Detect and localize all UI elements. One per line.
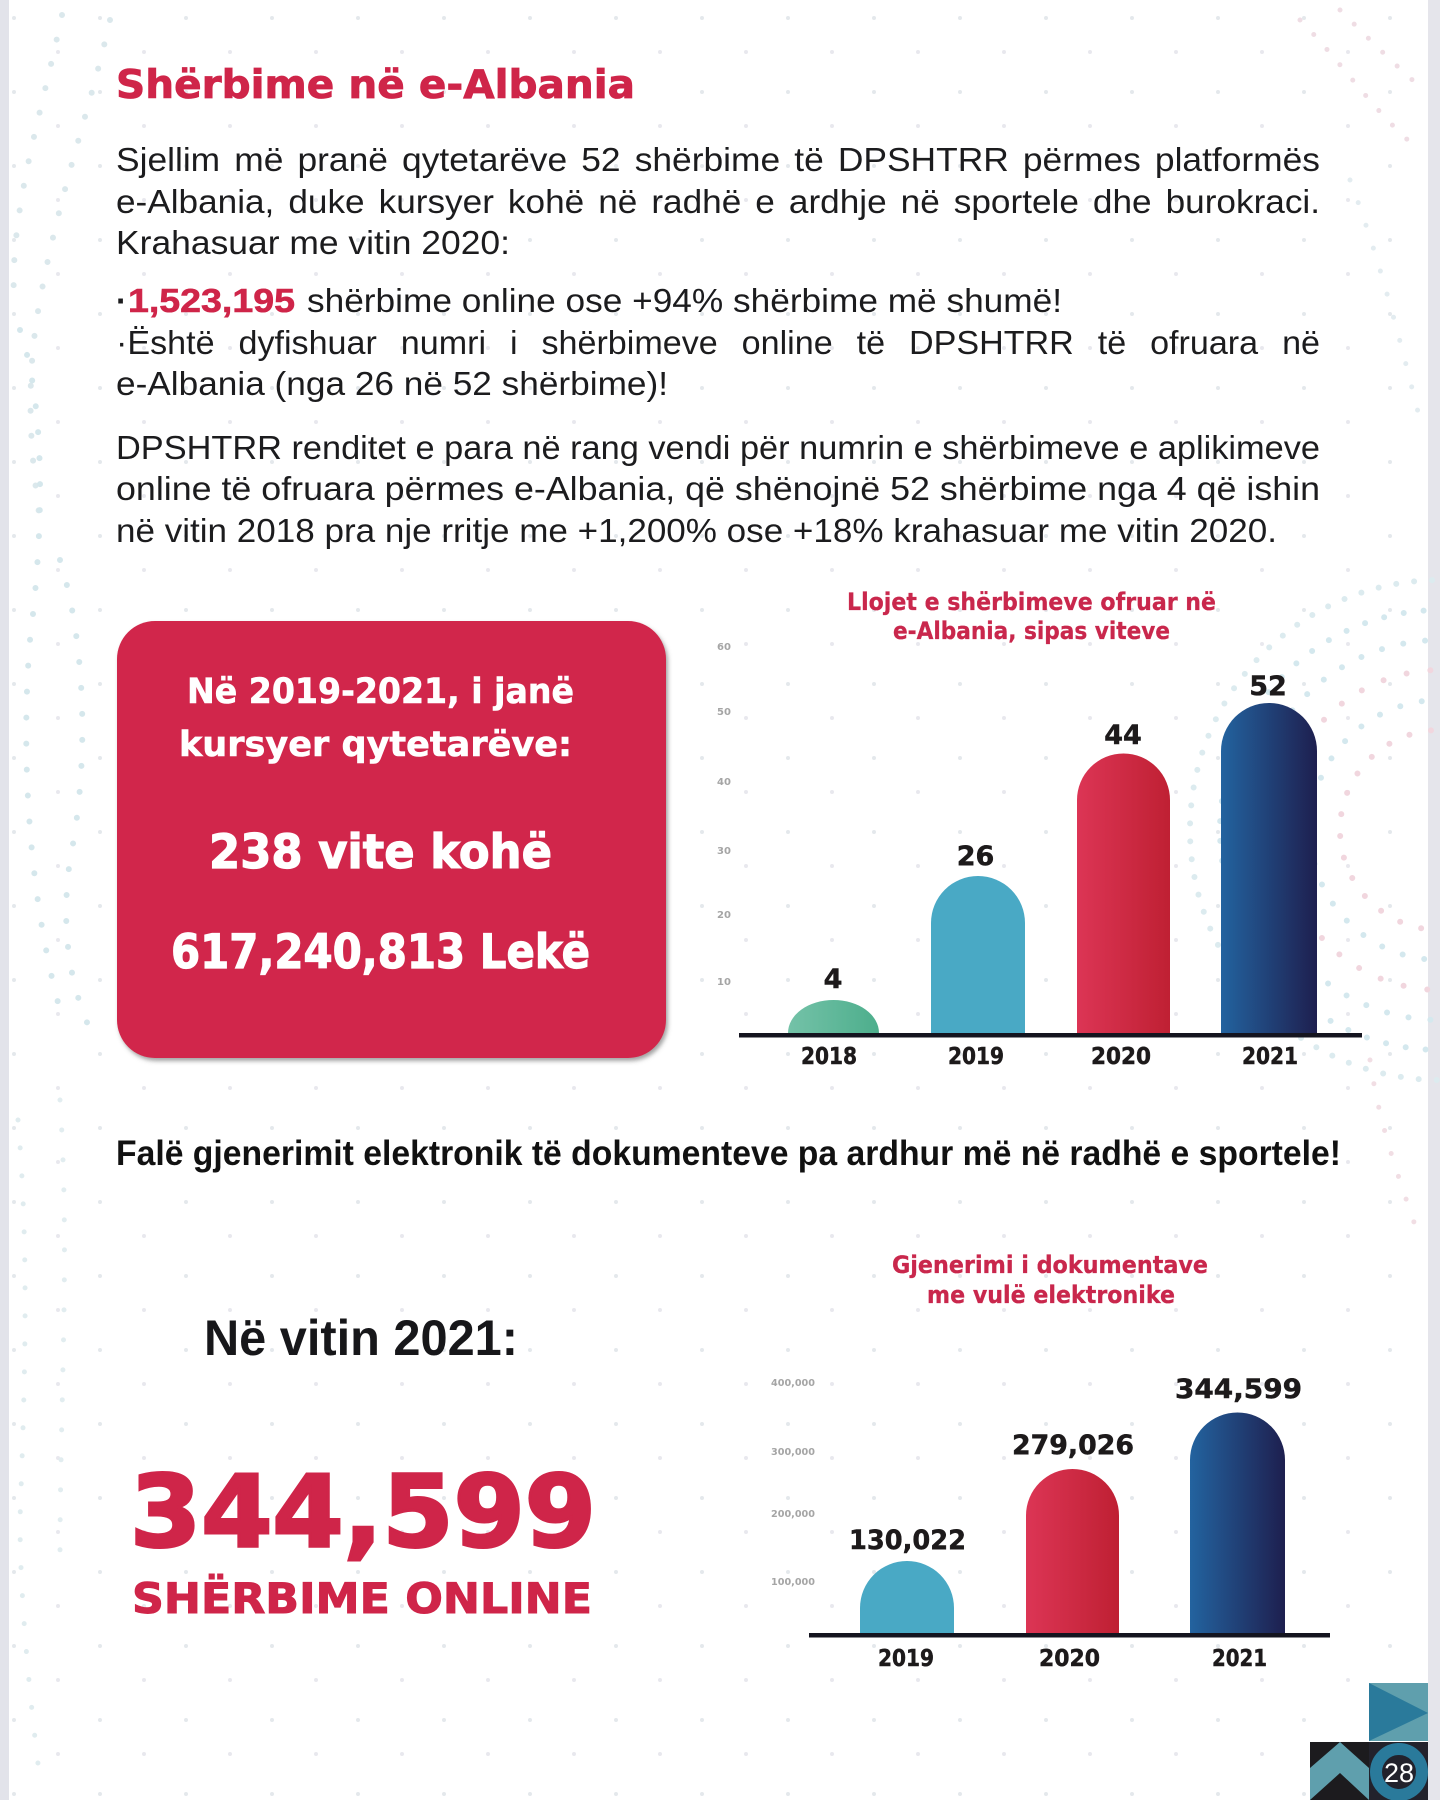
chart title: Gjenerimi i dokumentave (892, 1251, 1208, 1279)
card heading (179, 672, 574, 765)
year heading: Në vitin 2021: (204, 1310, 518, 1366)
bar 2020 (1026, 1469, 1119, 1634)
year labels: 2021 (1212, 1646, 1267, 1672)
year labels: 2019 (878, 1646, 934, 1672)
title: Shërbime në e-Albania (116, 63, 635, 108)
card money saved: 617,240,813 Lekë (171, 925, 590, 980)
y axis labels (771, 1378, 815, 1588)
y axis labels: 100,000 (771, 1577, 815, 1588)
value labels (824, 671, 1287, 995)
card heading: Në 2019-2021, i janë (187, 672, 574, 712)
ranking paragraph: në vitin 2018 pra nje rritje me +1,200% ose +18% krahasuar me vitin 2020. (116, 512, 1277, 549)
value labels: 44 (1104, 720, 1142, 751)
chart title (847, 588, 1216, 645)
y axis labels: 40 (717, 777, 731, 788)
year labels: 2021 (1242, 1044, 1298, 1070)
ranking paragraph (116, 429, 1320, 549)
chart: service types by year (717, 588, 1362, 1070)
year labels: 2020 (1039, 1646, 1100, 1672)
bullet list: ·Është dyfishuar numri i shërbimeve online të DPSHTRR të ofruara në (116, 324, 1320, 361)
section heading: Falë gjenerimit elektronik të dokumenteve pa ardhur më në radhë e sportele! (116, 1134, 1341, 1173)
big number: 344,599 (130, 1455, 596, 1570)
bar 2019 (860, 1561, 954, 1634)
year labels: 2018 (801, 1044, 857, 1070)
bar 2020 (1077, 754, 1170, 1034)
value labels: 344,599 (1175, 1374, 1302, 1405)
bullet list (116, 282, 1320, 402)
y axis labels: 30 (717, 846, 731, 857)
value labels: 52 (1249, 671, 1287, 702)
intro paragraph (116, 141, 1320, 261)
y axis labels (717, 642, 731, 988)
ranking paragraph: online të ofruara përmes e-Albania, që shënojnë 52 shërbime nga 4 që ishin (116, 470, 1320, 507)
intro paragraph: Krahasuar me vitin 2020: (116, 224, 510, 261)
y axis labels: 20 (717, 910, 731, 921)
value labels (849, 1374, 1302, 1556)
value labels: 279,026 (1012, 1430, 1134, 1461)
year labels (801, 1044, 1298, 1070)
intro paragraph: e-Albania, duke kursyer kohë në radhë e ardhje në sportele dhe burokraci. (116, 183, 1320, 220)
y axis labels: 50 (717, 707, 731, 718)
y axis labels: 400,000 (771, 1378, 815, 1389)
value labels: 4 (824, 964, 842, 995)
corner decoration with page number (1310, 1683, 1428, 1800)
value labels: 130,022 (849, 1525, 966, 1556)
page number: 28 (1384, 1758, 1414, 1788)
chart: e-sealed documents (771, 1251, 1330, 1672)
bar 2018 (788, 1000, 879, 1034)
intro paragraph: Sjellim më pranë qytetarëve 52 shërbime të DPSHTRR përmes platformës (116, 141, 1320, 178)
bar 2021 (1190, 1412, 1285, 1634)
chart title: Llojet e shërbimeve ofruar në (847, 588, 1216, 616)
y axis labels: 200,000 (771, 1509, 815, 1520)
chart title: me vulë elektronike (927, 1281, 1175, 1309)
card heading: kursyer qytetarëve: (179, 725, 572, 765)
year labels: 2020 (1091, 1044, 1151, 1070)
value labels: 26 (957, 841, 994, 872)
bar 2019 (931, 876, 1025, 1034)
chart title (892, 1251, 1208, 1309)
y axis labels: 60 (717, 642, 731, 653)
bullet list: · (116, 282, 127, 319)
y axis labels: 300,000 (771, 1447, 815, 1458)
year labels: 2019 (948, 1044, 1004, 1070)
baseline (809, 1633, 1330, 1638)
big number caption: SHËRBIME ONLINE (132, 1573, 592, 1623)
card time saved: 238 vite kohë (209, 825, 552, 880)
bullet list: shërbime online ose +94% shërbime më shumë! (307, 282, 1062, 319)
y axis labels: 10 (717, 977, 731, 988)
year labels (878, 1646, 1267, 1672)
bar 2021 (1221, 703, 1317, 1034)
bullet list: e-Albania (nga 26 në 52 shërbime)! (116, 365, 668, 402)
baseline (739, 1033, 1362, 1038)
bullet list: 1,523,195 (128, 282, 295, 319)
panel: savings card (117, 621, 666, 1058)
chart title: e-Albania, sipas viteve (893, 617, 1170, 645)
ranking paragraph: DPSHTRR renditet e para në rang vendi për numrin e shërbimeve e aplikimeve (116, 429, 1320, 466)
